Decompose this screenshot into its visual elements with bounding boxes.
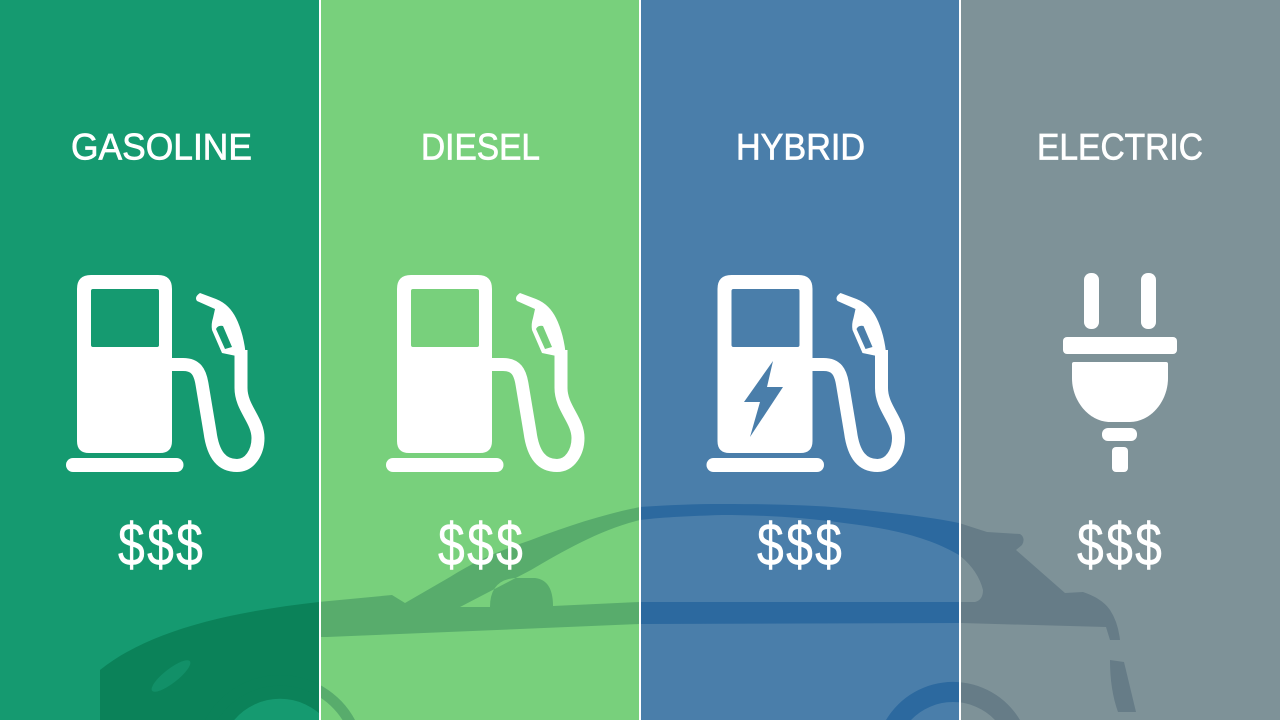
cost: electric: $$$ — [1077, 511, 1164, 578]
panel: hybrid background — [641, 0, 959, 720]
cost: gasoline: $$$ — [118, 511, 205, 578]
column: hybrid — [706, 126, 898, 578]
panel: diesel background — [321, 0, 639, 720]
cost: diesel: $$$ — [438, 511, 525, 578]
heading: diesel: DIESEL — [421, 126, 540, 168]
cost: hybrid: $$$ — [757, 511, 844, 578]
icon: fuel pump — [66, 275, 258, 472]
column: diesel — [386, 126, 578, 578]
car silhouette behind the panels — [100, 504, 1136, 720]
icon: electric plug — [1063, 273, 1177, 472]
panel: gasoline background — [0, 0, 319, 720]
icon: fuel pump — [386, 275, 578, 472]
icon: fuel pump with lightning bolt — [706, 275, 898, 472]
panel: electric background — [961, 0, 1280, 720]
heading: gasoline: GASOLINE — [71, 126, 252, 168]
column: gasoline — [66, 126, 258, 578]
heading: electric: ELECTRIC — [1037, 126, 1203, 168]
heading: hybrid: HYBRID — [736, 126, 865, 168]
column: electric — [1037, 126, 1203, 578]
